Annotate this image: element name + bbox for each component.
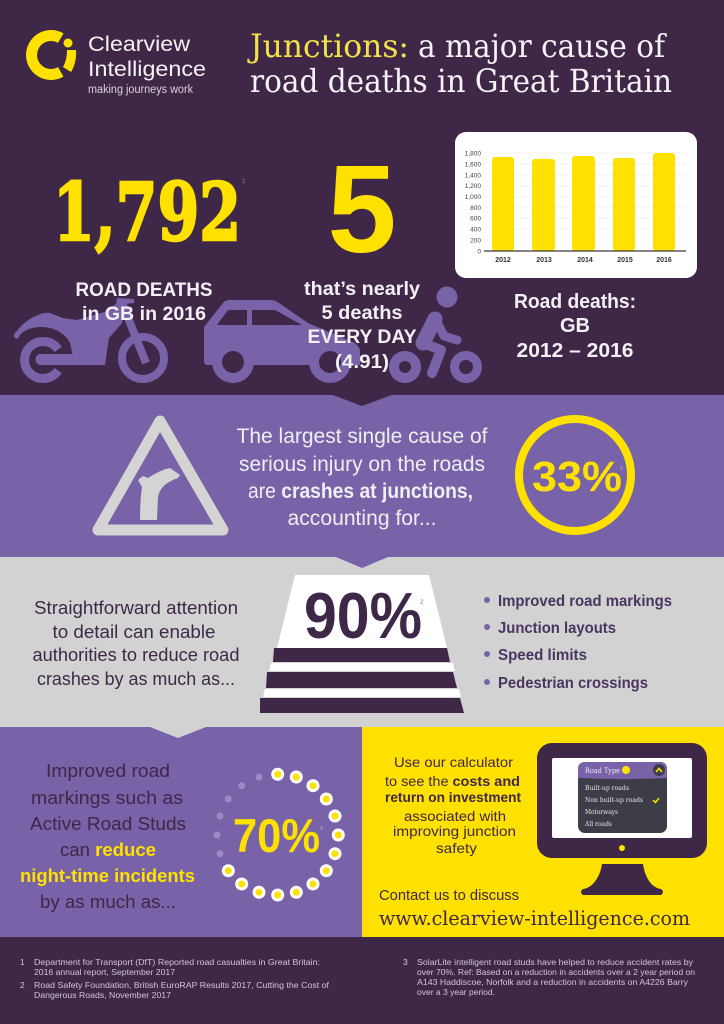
logo <box>32 33 206 96</box>
statistic: 5: 5 <box>328 141 396 279</box>
panel: road studs <box>0 727 362 937</box>
icon: road with 90 percent <box>260 575 464 713</box>
footnotes <box>20 957 695 1000</box>
bar chart: road deaths 2012-2016: 400 <box>470 226 481 234</box>
statistic label: deaths every day: that’s nearly <box>304 279 420 300</box>
statistic: 1,792: 1,792 <box>53 165 241 259</box>
statistic label: road deaths in 2016: in GB in 2016 <box>82 304 206 325</box>
bar chart: road deaths 2012-2016: 800 <box>470 205 481 212</box>
bar chart: road deaths 2012-2016: 1,400 <box>465 172 481 180</box>
bar chart: road deaths 2012-2016: 1,000 <box>465 194 481 201</box>
footnotes: over 70%. Ref: Based on a reduction in accidents over a 2 year period on <box>417 967 695 977</box>
statistic: 33 percent circle: 33% <box>532 453 622 501</box>
text: road studs <box>20 761 195 912</box>
text: road studs: Active Road Studs <box>30 814 186 834</box>
text: calculator: improving junction <box>393 823 516 839</box>
text: contact us <box>379 887 690 930</box>
title: Junctions: <box>247 27 409 65</box>
icon: monitor with road type dropdown: Built-up roads <box>585 784 629 792</box>
panel: attention to detail <box>0 557 724 727</box>
footnotes: 3 <box>403 957 408 967</box>
bar chart: road deaths 2012-2016: 2016 <box>656 257 672 264</box>
text: straightforward attention: to detail can enable <box>52 622 216 642</box>
logo: making journeys work <box>88 84 193 96</box>
statistic: 33 percent circle: 2 <box>620 466 623 472</box>
text: calculator: to see the costs and <box>385 773 520 789</box>
list: improvements: Junction layouts <box>498 620 616 637</box>
bar chart: road deaths 2012-2016: 2013 <box>536 257 552 264</box>
list: improvements: Pedestrian crossings <box>498 675 648 692</box>
list: improvements <box>484 593 672 692</box>
panel: calculator <box>362 727 724 937</box>
statistic: 1,792: 1 <box>242 179 246 185</box>
icon: chevron into purple band <box>333 395 392 406</box>
bar chart: road deaths 2012-2016: 2015 <box>617 257 633 264</box>
statistic label: deaths every day: 5 deaths <box>322 303 402 324</box>
text: road studs: can reduce <box>60 840 156 860</box>
bar chart: road deaths 2012-2016: 2014 <box>577 257 593 264</box>
text: straightforward attention: Straightforward attention <box>34 598 238 618</box>
chart caption: GB <box>560 315 590 337</box>
text: straightforward attention <box>32 598 240 689</box>
footnotes: Road Safety Foundation, British EuroRAP Results 2017, Cutting the Cost of <box>34 980 330 990</box>
text: calculator <box>385 754 521 856</box>
footnotes: 2016 annual report, September 2017 <box>34 967 175 977</box>
footnotes: SolarLite intelligent road studs have helped to reduce accident rates by <box>417 957 694 967</box>
statistic: 70 percent ring of studs: 3 <box>320 826 323 832</box>
footnotes: A143 Haddiscoe, Norfolk and a reduction in accidents on A4226 Barry <box>417 977 689 987</box>
statistic label: deaths every day: EVERY DAY <box>308 327 417 348</box>
statistic: 70 percent ring of studs <box>214 768 345 902</box>
statistic: 70 percent ring of studs: 70% <box>233 809 320 862</box>
logo: Intelligence <box>88 58 206 81</box>
text: largest single cause <box>236 425 488 530</box>
text: road studs: night-time incidents <box>20 866 195 886</box>
list: improvements: Improved road markings <box>498 593 672 610</box>
bar chart: road deaths 2012-2016: 1,200 <box>465 183 481 190</box>
chart caption: 2012 – 2016 <box>516 340 634 362</box>
footnotes: Dangerous Roads, November 2017 <box>34 990 171 1000</box>
footnotes: Department for Transport (DfT) Reported road casualties in Great Britain: <box>34 957 320 967</box>
chart caption <box>514 291 636 362</box>
bar chart: road deaths 2012-2016: 1,600 <box>465 162 481 168</box>
footnotes: 2 <box>20 980 25 990</box>
text: calculator: Use our calculator <box>394 754 513 770</box>
footnotes: 1 <box>20 957 25 967</box>
text: calculator: safety <box>436 840 477 856</box>
statistic label: deaths every day <box>304 279 420 373</box>
text: road studs: Improved road <box>46 761 170 781</box>
bar chart: road deaths 2012-2016 <box>455 132 697 278</box>
chart caption: Road deaths: <box>514 291 636 313</box>
statistic label: road deaths in 2016 <box>76 280 212 325</box>
icon: car <box>204 300 360 383</box>
title <box>247 27 672 100</box>
statistic: 33 percent circle <box>519 419 631 531</box>
text: straightforward attention: crashes by as much as... <box>37 669 235 689</box>
text: contact us: www.clearview-intelligence.com <box>379 906 690 930</box>
text: largest single cause: The largest single cause of <box>236 425 488 448</box>
text: contact us: Contact us to discuss <box>379 887 519 904</box>
icon: junction warning sign <box>98 421 223 530</box>
bar chart: road deaths 2012-2016: 200 <box>470 238 481 244</box>
text: largest single cause: are crashes at junctions, <box>248 480 473 503</box>
footnotes: over a 3 year period. <box>417 987 495 997</box>
statistic label: road deaths in 2016: ROAD DEATHS <box>76 280 212 301</box>
text: largest single cause: accounting for... <box>288 507 436 530</box>
icon: road with 90 percent: 2 <box>420 600 424 606</box>
icon: monitor with road type dropdown: All roads <box>584 820 612 828</box>
icon: monitor with road type dropdown <box>537 743 707 895</box>
text: calculator: return on investment <box>385 789 521 805</box>
text: largest single cause: serious injury on the roads <box>239 453 485 476</box>
text: road studs: markings such as <box>31 788 183 808</box>
bar chart: road deaths 2012-2016: 600 <box>470 216 481 222</box>
bar chart: road deaths 2012-2016: 2012 <box>495 257 511 264</box>
text: calculator: associated with <box>404 808 506 824</box>
list: improvements: Speed limits <box>498 647 587 664</box>
icon: motorbike <box>14 298 164 379</box>
icon: chevron into road studs panel <box>150 727 206 738</box>
panel: junction crashes <box>0 395 724 557</box>
statistic label: deaths every day: (4.91) <box>335 352 389 373</box>
text: straightforward attention: authorities to reduce road <box>32 645 240 665</box>
bar chart: road deaths 2012-2016: 0 <box>477 248 481 256</box>
icon: motorcyclist <box>394 286 478 378</box>
logo: Clearview <box>88 33 191 56</box>
icon: monitor with road type dropdown: Motorways <box>585 808 618 816</box>
icon: road with 90 percent: 90% <box>304 579 422 652</box>
icon: monitor with road type dropdown: Road Type <box>585 767 620 775</box>
icon: monitor with road type dropdown: Non built-up roads <box>585 796 643 804</box>
bar chart: road deaths 2012-2016: 1,800 <box>465 150 481 158</box>
text: road studs: by as much as... <box>40 892 176 912</box>
icon: chevron into grey band <box>336 557 388 568</box>
title: road deaths in Great Britain <box>250 62 672 100</box>
title: a major cause of <box>418 27 667 65</box>
